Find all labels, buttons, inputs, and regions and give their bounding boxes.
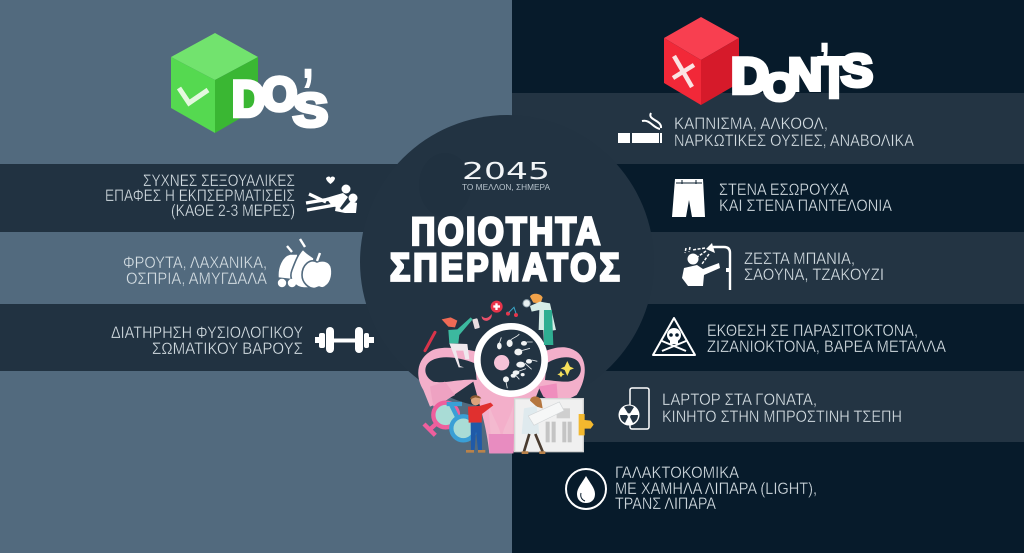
heading: don'ts bbox=[731, 29, 873, 111]
icon: red cube with x bbox=[664, 17, 739, 105]
logo: 2045: 2045 bbox=[462, 157, 550, 185]
text: tight clothes: ΚΑΙ ΣΤΕΝΑ ΠΑΝΤΕΛΟΝΙΑ bbox=[719, 197, 892, 215]
text: pesticides bbox=[707, 322, 946, 356]
icon: shorts bbox=[672, 179, 705, 217]
heading: do's: S bbox=[293, 84, 328, 136]
icon: cigarette bbox=[618, 113, 662, 143]
text: dairy and fats: ΜΕ ΧΑΜΗΛΑ ΛΙΠΑΡΑ (LIGHT), bbox=[615, 480, 817, 498]
text: laptop and phone: ΚΙΝΗΤΟ ΣΤΗΝ ΜΠΡΟΣΤΙΝΗ ΤΣΕΠΗ bbox=[662, 408, 902, 426]
text: sexual activity: (ΚΑΘΕ 2-3 ΜΕΡΕΣ) bbox=[171, 202, 295, 220]
text: body weight bbox=[111, 324, 303, 358]
icon: medical plus badge bbox=[491, 301, 503, 313]
text: hot baths bbox=[744, 250, 884, 284]
text: dairy and fats: ΓΑΛΑΚΤΟΚΟΜΙΚΑ bbox=[615, 464, 739, 482]
item: laptop and phone bbox=[618, 388, 902, 429]
icon: fruits bbox=[278, 239, 332, 288]
heading: don'ts: D bbox=[731, 48, 769, 104]
text: dairy and fats bbox=[615, 464, 817, 513]
panel: do's list bbox=[105, 172, 374, 358]
panel: don'ts header bbox=[664, 17, 873, 111]
item: pesticides bbox=[653, 318, 946, 356]
item: fruits and vegetables bbox=[123, 239, 332, 288]
heading: don'ts: S bbox=[841, 45, 873, 96]
figure: woman sitting bbox=[442, 317, 480, 367]
uterus bbox=[418, 347, 585, 453]
text: smoking bbox=[674, 115, 914, 150]
icon: heart candy bbox=[482, 314, 492, 321]
figure: doctor with magnifier bbox=[523, 294, 556, 345]
illustration: reproductive system with figures bbox=[418, 294, 594, 454]
text: laptop and phone: LAPTOP ΣΤΑ ΓΟΝΑΤΑ, bbox=[662, 391, 817, 409]
text: tight clothes bbox=[719, 181, 892, 215]
heading: don'ts: T bbox=[818, 46, 850, 111]
text: fruits: ΟΣΠΡΙΑ, ΑΜΥΓΔΑΛΑ bbox=[126, 270, 267, 288]
text: hot baths: ΖΕΣΤΑ ΜΠΑΝΙΑ, bbox=[744, 250, 855, 268]
icon: shower person bbox=[682, 243, 730, 290]
text: body weight: ΣΩΜΑΤΙΚΟΥ ΒΑΡΟΥΣ bbox=[152, 340, 303, 358]
icon: cherries bbox=[506, 307, 518, 317]
item: tight clothes bbox=[672, 179, 892, 217]
figure: man in red bbox=[466, 395, 493, 453]
text: body weight: ΔΙΑΤΗΡΗΣΗ ΦΥΣΙΟΛΟΓΙΚΟΥ bbox=[111, 324, 303, 342]
text: smoking: ΚΑΠΝΙΣΜΑ, ΑΛΚΟΟΛ, bbox=[674, 115, 828, 133]
icon: green cube with check bbox=[171, 33, 258, 133]
icon: phone radiation bbox=[618, 388, 649, 429]
icon: sparkles bbox=[557, 361, 574, 377]
logo: 2045 bbox=[462, 157, 551, 192]
text: dairy and fats: ΤΡΑΝΣ ΛΙΠΑΡΑ bbox=[615, 495, 716, 513]
panel: do's header bbox=[171, 33, 328, 136]
item: dairy and fats bbox=[566, 464, 817, 513]
text: fruits bbox=[123, 254, 267, 288]
figure: woman with syringe bbox=[522, 396, 564, 454]
text: sexual activity: ΕΠΑΦΕΣ Η ΕΚΠΣΕΡΜΑΤΙΣΕΙΣ bbox=[105, 187, 295, 205]
title: ΣΠΕΡΜΑΤΟΣ bbox=[390, 245, 620, 289]
text: fruits: ΦΡΟΥΤΑ, ΛΑΧΑΝΙΚΑ, bbox=[123, 254, 267, 272]
text: tight clothes: ΣΤΕΝΑ ΕΣΩΡΟΥΧΑ bbox=[719, 181, 849, 199]
text: pesticides: ΕΚΘΕΣΗ ΣΕ ΠΑΡΑΣΙΤΟΚΤΟΝΑ, bbox=[707, 322, 918, 340]
heading: don'ts: O bbox=[763, 67, 796, 109]
heading: do's: ’ bbox=[302, 55, 314, 128]
item: body weight bbox=[111, 324, 374, 358]
icon: dumbbell bbox=[315, 327, 374, 353]
heading: don'ts: ’ bbox=[819, 29, 830, 102]
logo: 2045: ΤΟ ΜΕΛΛΟΝ, ΣΗΜΕΡΑ bbox=[462, 183, 551, 192]
icon: drop in circle bbox=[566, 469, 606, 509]
heading: do's bbox=[232, 55, 328, 136]
title bbox=[390, 209, 620, 289]
icon: test tube bbox=[425, 332, 435, 351]
icon: couple bbox=[306, 176, 358, 213]
panel: don'ts list bbox=[566, 113, 946, 513]
text: sexual activity: ΣΥΧΝΕΣ ΣΕΞΟΥΑΛΙΚΕΣ bbox=[143, 172, 295, 190]
text: sexual activity bbox=[105, 172, 295, 220]
icon: toxic triangle bbox=[653, 318, 695, 355]
heading: do's: D bbox=[232, 71, 265, 127]
icon: gender symbols bbox=[424, 403, 475, 440]
text: pesticides: ΖΙΖΑΝΙΟΚΤΟΝΑ, ΒΑΡΕΑ ΜΕΤΑΛΛΑ bbox=[707, 338, 946, 356]
clipboard bbox=[515, 399, 594, 452]
text: hot baths: ΣΑΟΥΝΑ, ΤΖΑΚΟΥΖΙ bbox=[744, 266, 884, 284]
text: smoking: ΝΑΡΚΩΤΙΚΕΣ ΟΥΣΙΕΣ, ΑΝΑΒΟΛΙΚΑ bbox=[674, 132, 914, 150]
item: hot baths bbox=[682, 243, 884, 290]
heading: do's: O bbox=[262, 68, 297, 120]
item: sexual activity bbox=[105, 172, 358, 220]
heading: don'ts: N bbox=[788, 49, 822, 100]
title: ΠΟΙΟΤΗΤΑ bbox=[411, 209, 600, 253]
text: laptop and phone bbox=[662, 391, 902, 426]
magnifier with sperm and egg bbox=[477, 326, 545, 394]
item: smoking bbox=[618, 113, 914, 150]
